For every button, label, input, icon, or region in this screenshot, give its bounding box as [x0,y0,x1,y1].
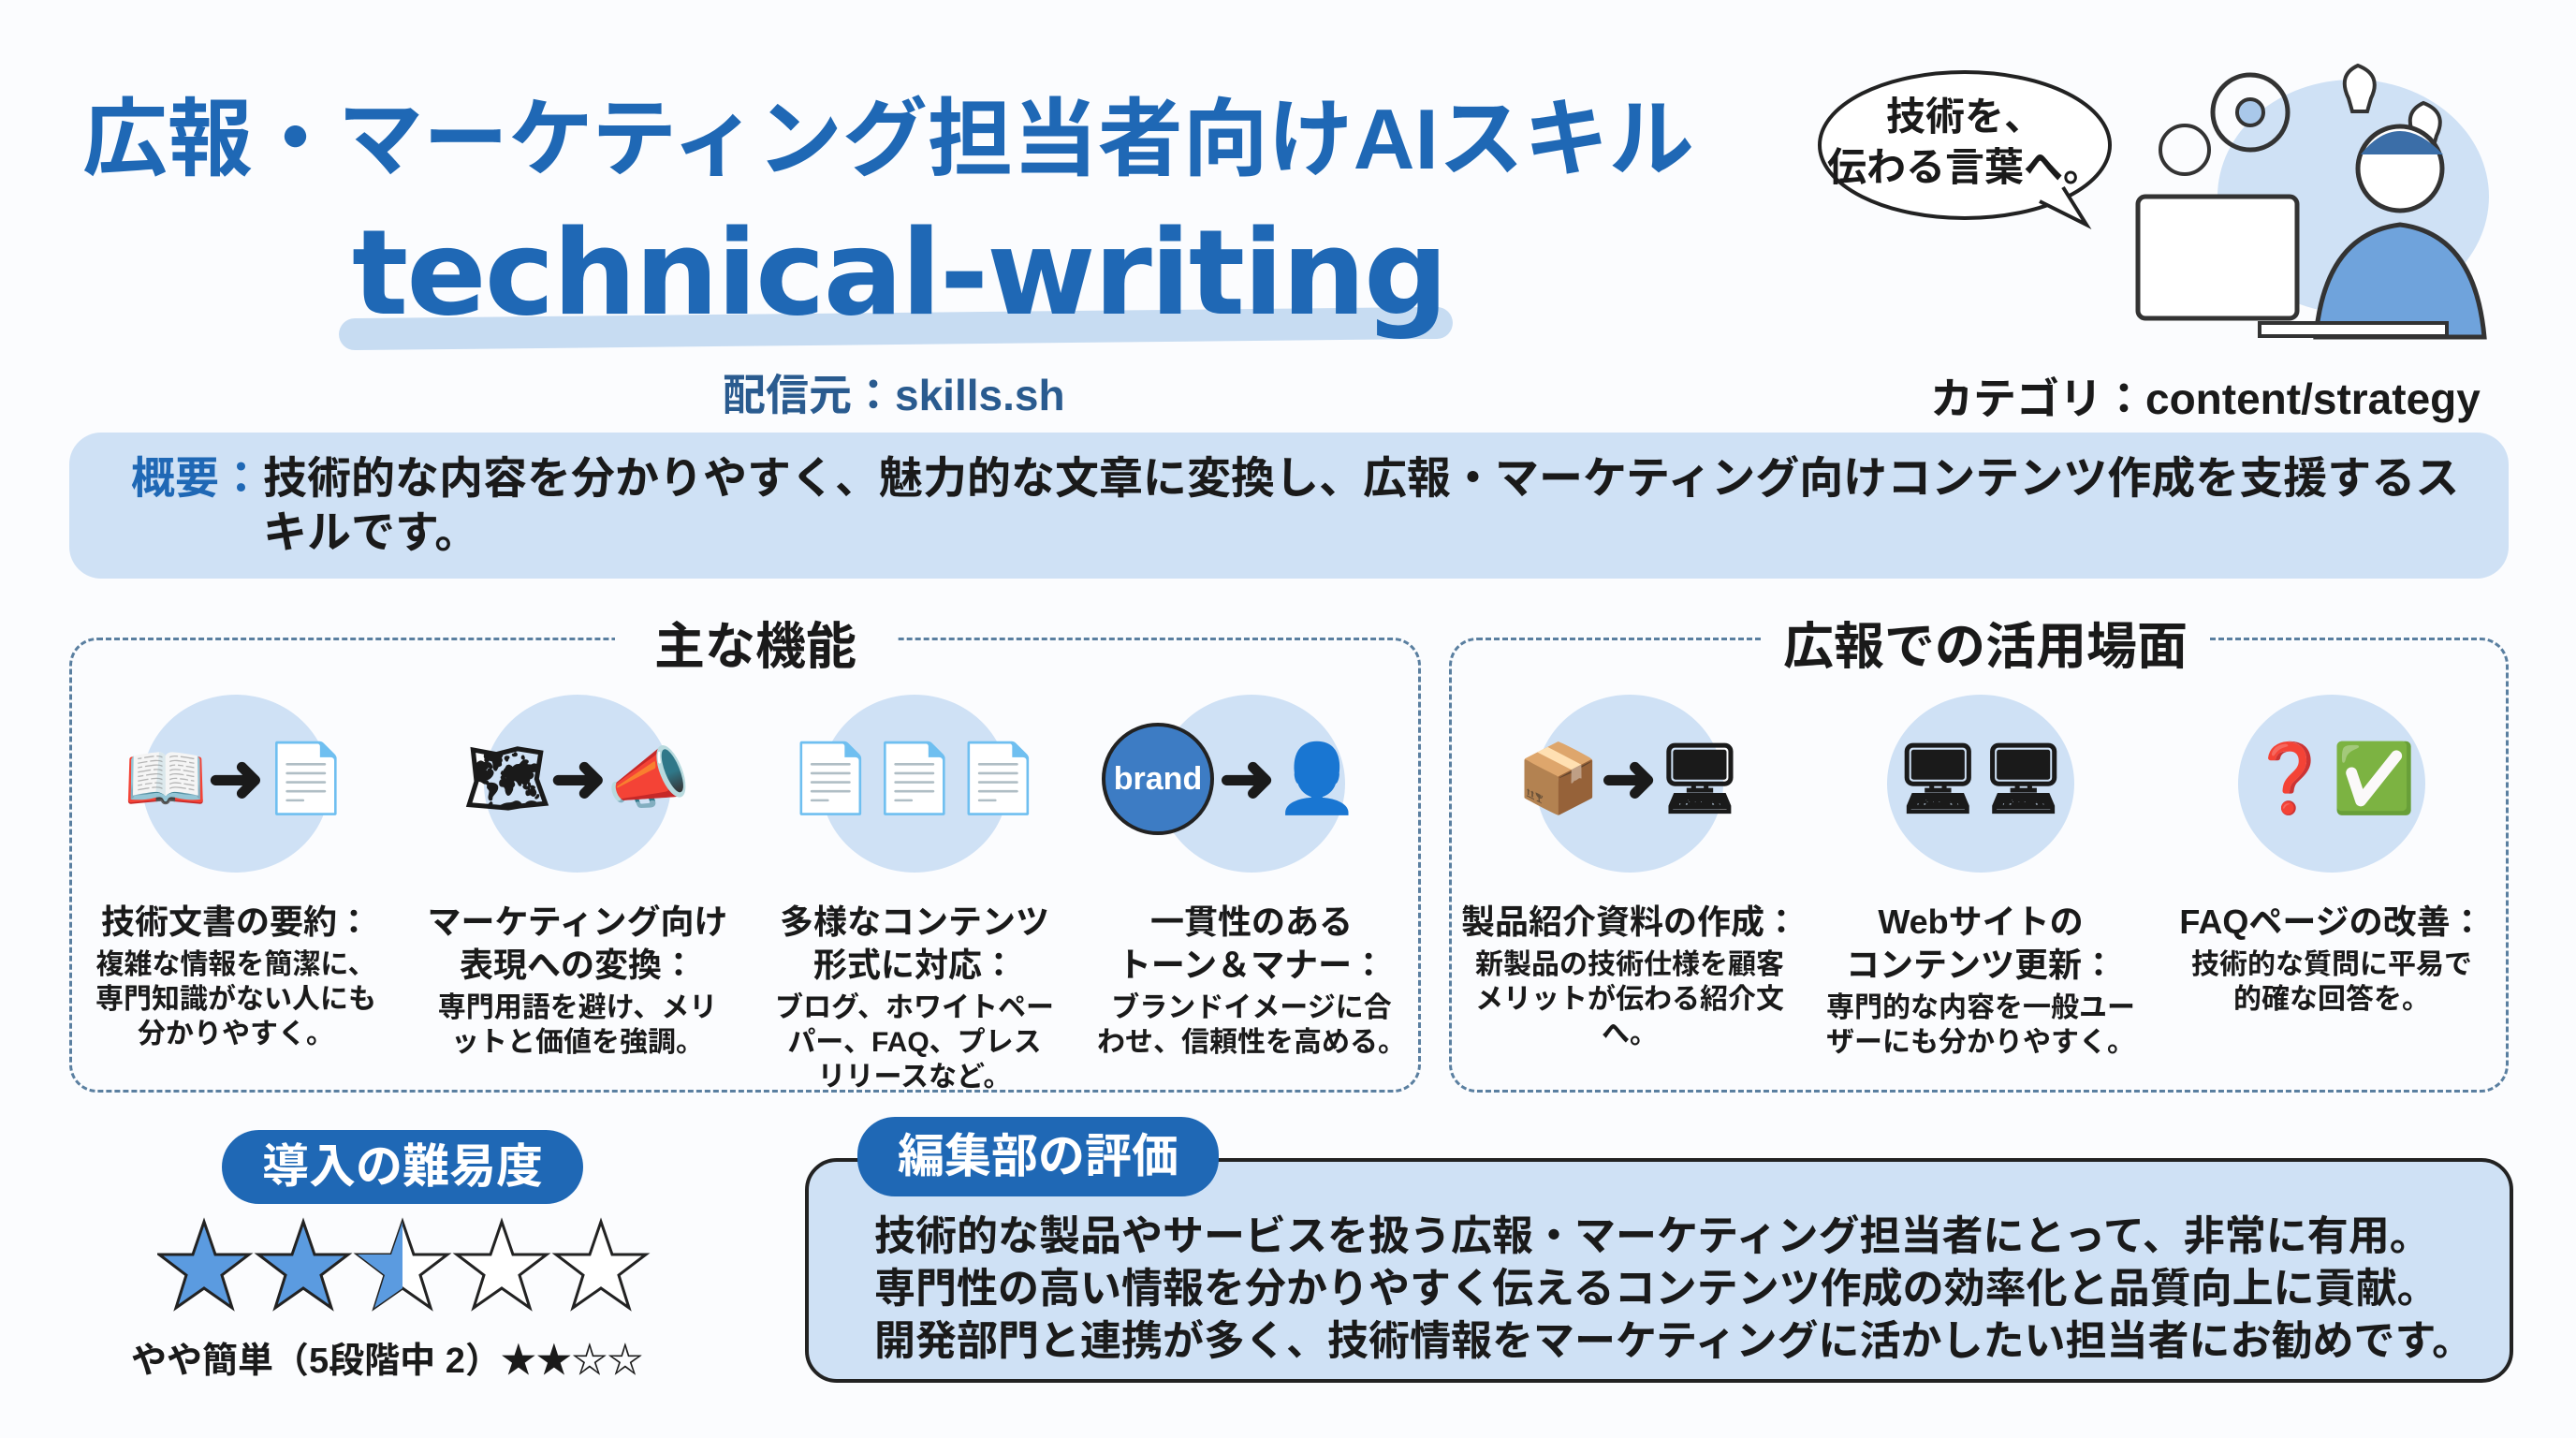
usage 1: 📦➜🖥 [1516,741,1743,816]
title: 広報・マーケティング担当者向けAIスキル [82,93,1694,187]
feature 4: ➜👤 [1219,741,1359,816]
editorial review box: 開発部門と連携が多く、技術情報をマーケティングに活かしたい担当者にお勧めです。 [874,1318,2473,1364]
usage 1: メリットが伝わる紹介文 [1475,984,1784,1015]
source: 配信元：skills.sh [723,371,1065,419]
usage 2: 専門的な内容を一般ユー [1826,992,2135,1023]
usage 3: 技術的な質問に平易で [2191,949,2472,980]
speech bubble: 伝わる言葉へ。 [1827,145,2102,189]
feature 1: 📖➜📄 [124,741,348,816]
feature 4: brand [1114,761,1202,797]
feature 1: 技術文書の要約： [101,902,371,941]
feature 3: 形式に対応： [813,946,1016,984]
panel: usage scenes [1449,638,2509,1093]
usage 2: コンテンツ更新： [1846,946,2115,984]
heading: 主な機能 [615,605,896,679]
feature 2: 専門用語を避け、メリ [438,992,717,1023]
feature 3: パー、FAQ、プレス [787,1027,1042,1058]
feature 4: トーン＆マナー： [1118,946,1385,984]
feature 3: ブログ、ホワイトペー [775,992,1054,1023]
editorial label: 編集部の評価 [898,1130,1178,1182]
feature 4: 一貫性のある [1150,902,1353,941]
feature 3: 多様なコンテンツ [780,902,1049,941]
feature 2: 表現への変換： [460,946,695,984]
usage 1: 製品紹介資料の作成： [1461,902,1798,941]
usage 3: 的確な回答を。 [2233,984,2430,1015]
usage 3: FAQページの改善： [2179,902,2484,941]
category: カテゴリ：content/strategy [1930,374,2481,423]
feature 1: 複雑な情報を簡潔に、 [95,949,376,980]
feature 4: わせ、信頼性を高める。 [1097,1027,1406,1058]
feature 4 [1097,695,1406,1058]
difficulty text: やや簡単（5段階中 2）★★☆☆ [131,1342,643,1381]
speech bubble: 技術を、 [1886,95,2043,139]
usage 2: 🖥🖥 [1895,741,2066,816]
feature 1 [95,695,376,1049]
panel: main features [69,638,1421,1093]
speech bubble [1818,70,2112,229]
usage 2: Webサイトの [1878,902,2084,941]
overview panel: キルです。 [263,507,478,557]
overview panel: 概要：技術的な内容を分かりやすく、魅力的な文章に変換し、広報・マーケティング向けコンテンツ作成を支援するス [131,453,2459,503]
heading: 主な機能: 主な機能 [654,619,856,675]
overview panel [69,433,2509,579]
usage 1: へ。 [1602,1019,1658,1049]
usage 1: 新製品の技術仕様を顧客 [1475,949,1784,980]
subtitle: technical-writing: technical-writing [352,204,1446,342]
feature 2: 🗺➜📣 [464,741,691,816]
feature 1: 分かりやすく。 [138,1019,334,1049]
heading: 広報での活用場面: 広報での活用場面 [1783,619,2188,675]
editorial review box [805,1158,2513,1383]
feature 2 [427,695,728,1058]
difficulty label [222,1130,583,1204]
underline highlight [339,307,1453,350]
illustration: person at computer [2136,64,2489,339]
editorial label [857,1117,1219,1196]
usage 1 [1461,695,1798,1049]
feature 3: 📄📄📄 [789,741,1040,816]
feature 3: リリースなど。 [818,1062,1011,1093]
feature 2: ットと価値を強調。 [451,1027,704,1058]
star rating [157,1217,650,1312]
usage 2: ザーにも分かりやすく。 [1826,1027,2135,1058]
usage 3: ❓✅ [2247,741,2416,816]
feature 2: マーケティング向け [427,902,728,941]
heading: 広報での活用場面 [1761,605,2210,679]
editorial review box: 技術的な製品やサービスを扱う広報・マーケティング担当者にとって、非常に有用。 [874,1213,2431,1259]
difficulty label: 導入の難易度 [262,1140,543,1193]
usage 3 [2179,695,2484,1015]
feature 4: ブランドイメージに合 [1111,992,1392,1023]
feature 1: 専門知識がない人にも [95,984,376,1015]
usage 2 [1826,695,2135,1058]
feature 3 [775,695,1054,1093]
editorial review box: 専門性の高い情報を分かりやすく伝えるコンテンツ作成の効率化と品質向上に貢献。 [874,1266,2438,1312]
